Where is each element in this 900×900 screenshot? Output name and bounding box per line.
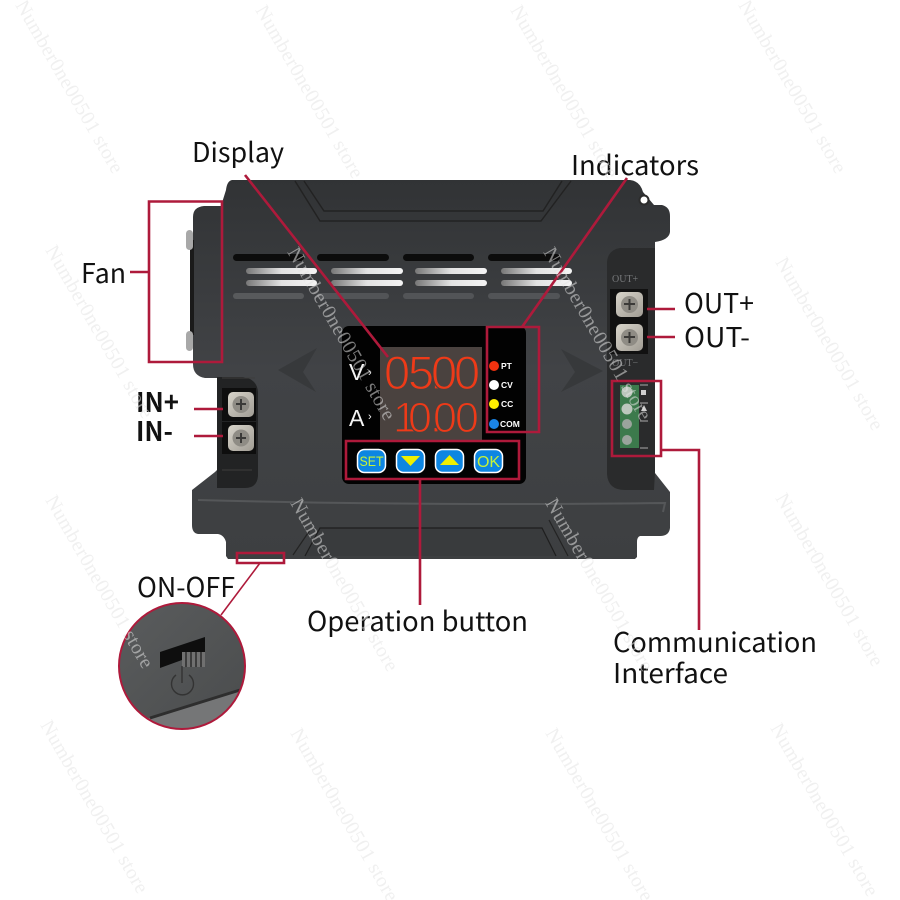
watermarks: Number0ne00501 store: [541, 494, 658, 675]
status indicators: CV: [501, 380, 513, 390]
input callouts: [194, 409, 223, 436]
label: ON-OFF: ON-OFF: [137, 566, 235, 605]
right output terminal: [607, 248, 655, 490]
operation button callout: [346, 441, 519, 605]
V and A labels: ›: [368, 411, 372, 423]
top trapezoid panel: [295, 181, 571, 221]
status indicators: [489, 361, 520, 429]
watermarks: Number0ne00501 store: [734, 0, 851, 177]
status indicators: PT: [501, 361, 513, 371]
label: IN+: IN+: [136, 381, 179, 420]
communication callout: [612, 381, 699, 630]
operation buttons: SET: [360, 453, 384, 469]
V and A labels: V: [349, 359, 365, 385]
right output terminal: OUT−: [612, 358, 639, 369]
label: Indicators: Indicators: [571, 144, 699, 183]
watermarks: Number0ne00501 store: [771, 254, 888, 434]
label: OUT+: OUT+: [684, 282, 754, 321]
label: OUT-: OUT-: [684, 316, 750, 355]
V and A labels: A: [349, 405, 365, 431]
status indicators: COM: [500, 419, 520, 429]
fan screws: [186, 230, 194, 351]
lower body contour: [198, 500, 665, 556]
watermarks: Number0ne00501 store: [41, 242, 158, 422]
label: Display: Display: [192, 131, 284, 170]
display panel: [342, 326, 526, 484]
display callout: [245, 175, 388, 357]
watermarks: Number0ne00501 store: [771, 490, 888, 670]
watermarks: Number0ne00501 store: [283, 244, 400, 424]
label: Communication Interface: [613, 621, 817, 691]
label: Communication Interface: Interface: [613, 652, 728, 691]
watermarks: Number0ne00501 store: [11, 0, 128, 177]
watermarks: Number0ne00501 store: [36, 716, 153, 897]
label: Operation button: Operation button: [307, 600, 528, 639]
right output terminal: OUT+: [612, 274, 639, 285]
watermarks: Number0ne00501 store: [286, 494, 403, 675]
arrow marks: [278, 348, 603, 392]
operation buttons: OK: [477, 454, 500, 471]
V and A labels: ›: [368, 367, 372, 379]
operation buttons: [358, 450, 502, 472]
watermarks: Number0ne00501 store: [766, 720, 883, 900]
on-off close-up circle: [119, 603, 245, 735]
watermarks: Number0ne00501 store: [251, 2, 368, 182]
indicators callout: [487, 178, 627, 432]
watermarks: Number0ne00501 store: [506, 2, 623, 182]
voltage reading: 05.00: [384, 346, 480, 399]
status indicators: CC: [501, 399, 513, 409]
watermarks: Number0ne00501 store: [539, 244, 656, 424]
display screen: [380, 347, 482, 440]
label: Communication Interface: Communication: [613, 621, 817, 660]
current reading: 10.00: [393, 394, 479, 442]
V and A labels: [349, 359, 372, 431]
label: Fan: Fan: [81, 252, 126, 291]
watermarks: Number0ne00501 store: [41, 492, 158, 672]
label: IN-: IN-: [136, 410, 173, 449]
left input terminal: [217, 377, 258, 488]
communication connector: [620, 385, 648, 448]
vent slots: [233, 254, 572, 299]
output callouts: [647, 309, 675, 337]
fan callout: [130, 202, 222, 362]
device body: [186, 180, 670, 559]
lug: [640, 196, 648, 204]
on-off callout: [237, 553, 284, 563]
callout lines and boxes: [130, 175, 699, 630]
